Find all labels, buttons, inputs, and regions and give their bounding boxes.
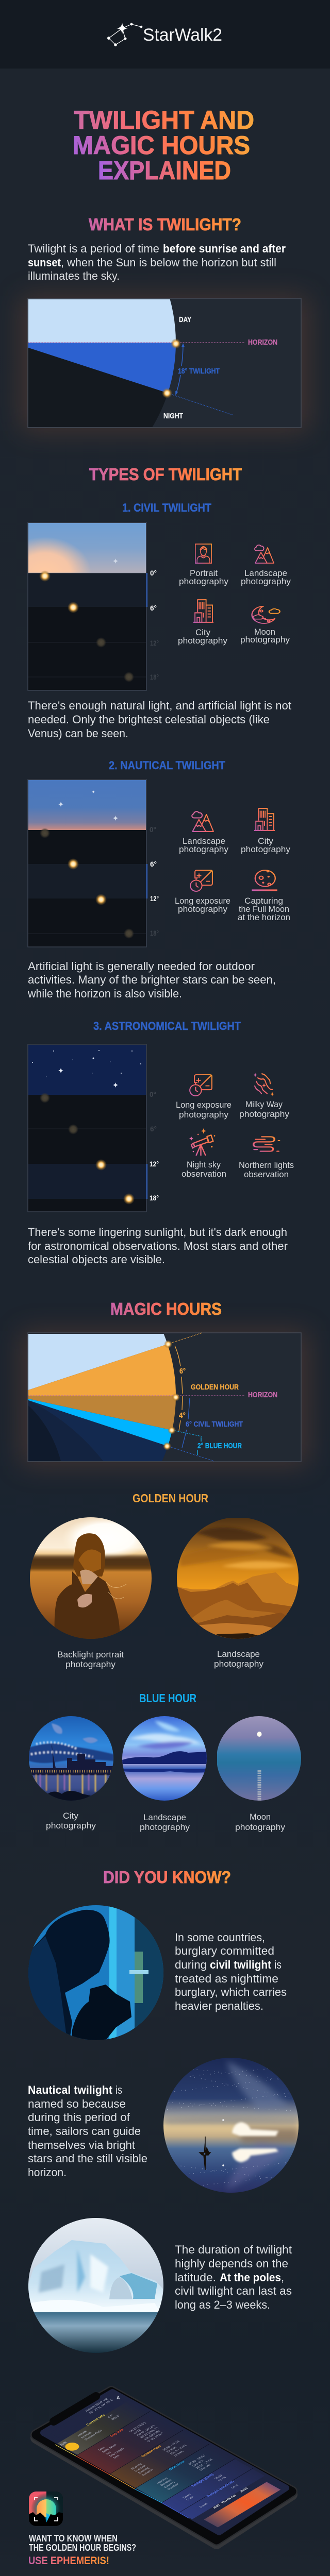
door handle <box>129 1952 148 2003</box>
day info: Solar Noon <box>102 2444 118 2453</box>
location: 60° 10' N, 24° 56' E <box>89 2399 114 2414</box>
caption: long exposure photography: photography <box>179 1110 228 1120</box>
nautical twilight section <box>179 2469 265 2519</box>
callout: want to know when: THE GOLDEN HOUR BEGINS? <box>29 2543 136 2553</box>
text: civil twilight description: Venus) can be seen. <box>28 727 128 740</box>
caption: city photography: photography <box>178 636 227 646</box>
caption: backlight portrait photography: photography <box>65 1659 116 1669</box>
caption: landscape photography <box>179 836 228 854</box>
golden hour: Duration <box>141 2469 154 2477</box>
date strip <box>212 2487 250 2509</box>
sailboat <box>200 2137 210 2170</box>
horizon line <box>28 1395 245 1396</box>
day sky <box>28 1334 168 1390</box>
blue hour: 15m 44s <box>199 2464 212 2471</box>
degree scale: 0° <box>150 1090 156 1098</box>
photo: backlight portrait <box>30 1516 152 1639</box>
arrow: 18 degrees <box>176 344 184 394</box>
heading: magic hours: MAGIC HOURS <box>110 1299 222 1318</box>
text: nautical twilight description <box>27 960 276 1000</box>
blue hour: Blue Hour <box>168 2460 186 2471</box>
label: horizon: HORIZON <box>248 338 277 347</box>
blue hour: 05:29 - 05:53 <box>188 2454 207 2465</box>
glow behind twilight diagram <box>21 296 308 431</box>
caption: moon photography <box>235 1812 286 1832</box>
captions for blue hour <box>46 1811 286 1832</box>
degree scale: 6° <box>150 860 157 868</box>
stars <box>58 790 118 821</box>
golden hour: 1h 24m <box>173 2450 185 2457</box>
day info: (38.5°, 180.4°) <box>136 2425 156 2437</box>
twilight limit line <box>168 393 234 415</box>
clouds and reflection <box>232 2122 278 2162</box>
caption: night sky observation: observation <box>182 1169 226 1179</box>
gloved hands <box>72 1985 131 2040</box>
icon: northern lights <box>254 1137 279 1151</box>
golden hour: Golden Hour <box>141 2445 162 2458</box>
photo: burglar <box>28 1905 163 2040</box>
iceberg shape <box>28 2240 163 2312</box>
day info: Sms <box>112 2454 121 2459</box>
degree scale: 6° <box>150 604 157 612</box>
blue hour section <box>136 2445 235 2502</box>
text: astronomical twilight description: There's some lingering sunlight, but it's dark enough <box>28 1226 287 1239</box>
caption: landscape photography: Landscape <box>217 1649 260 1659</box>
caption: backlight portrait photography: Backlight portrait <box>57 1650 124 1659</box>
colored edge lines <box>55 2445 189 2518</box>
text: burglary fact <box>175 1931 287 2012</box>
caption: capturing the full moon <box>238 896 290 922</box>
text: nautical fact: themselves via bright <box>28 2139 135 2151</box>
caption: long exposure photography <box>175 896 230 914</box>
section dividers <box>77 2411 253 2512</box>
label: civil twilight: 6° CIVIL TWILIGHT <box>186 1420 243 1429</box>
caption: moon photography <box>240 627 290 645</box>
title: TWILIGHT AND <box>74 106 254 134</box>
sun positions <box>39 570 134 682</box>
moon <box>257 1732 262 1737</box>
golden hour: 19:26 - 20:51 <box>170 2444 188 2455</box>
caption: landscape photography <box>140 1812 190 1832</box>
label: golden hour: GOLDEN HOUR <box>191 1383 239 1392</box>
degree scale <box>146 569 159 681</box>
title: MAGIC HOURS <box>73 131 250 160</box>
day info: 13h 59m 58s <box>143 2430 161 2441</box>
caption: portrait photography: Portrait <box>190 568 218 578</box>
degree scale: 18° <box>150 929 159 937</box>
heading: nautical twilight: 2. NAUTICAL TWILIGHT <box>109 759 225 772</box>
glow behind magic hours diagram <box>21 1331 308 1466</box>
caption: landscape photography <box>214 1649 263 1669</box>
stars <box>165 2066 299 2190</box>
day info section <box>77 2412 183 2474</box>
label: 4 degrees: 4° <box>179 1411 186 1420</box>
label: day: DAY <box>179 315 191 324</box>
day info: Rise <box>98 2447 106 2451</box>
arrows <box>175 1346 201 1455</box>
text: burglary fact: treated as nighttime <box>175 1972 278 1985</box>
heading: golden hour: GOLDEN HOUR <box>133 1492 208 1505</box>
golden hour: 05:55 - 07:18 <box>162 2440 181 2451</box>
golden hour: Morning <box>130 2463 143 2470</box>
header band with logo <box>0 0 330 69</box>
golden hour: 1h 23m <box>166 2446 177 2453</box>
nautical twilight: 04:42 <box>231 2484 241 2489</box>
day info: 20:23 (286.2°) <box>140 2427 159 2439</box>
day sky <box>28 299 176 343</box>
text: twilight definition: before sunrise and after <box>163 242 286 255</box>
caption: northern lights observation: Northern lights <box>239 1160 294 1170</box>
current info: 0.4° <box>107 2414 115 2419</box>
text: civil twilight description: needed. Only the brightest celestial objects (like <box>28 713 270 726</box>
text: burglary fact: is <box>274 1958 282 1971</box>
status letter: A <box>117 2395 120 2400</box>
blue hour wedge <box>28 1399 172 1446</box>
text: polar twilight fact <box>175 2243 292 2311</box>
stars <box>32 1050 141 1088</box>
text: civil twilight description: There's enough natural light, and artificial light is not <box>28 699 291 712</box>
caption: backlight portrait photography <box>57 1650 124 1669</box>
text: astronomical twilight description: for astronomical observations. Most stars and other <box>28 1240 288 1252</box>
night wedge <box>28 348 168 427</box>
heading: astronomical twilight: 3. ASTRONOMICAL TWILIGHT <box>93 1020 241 1032</box>
caption: moon photography: photography <box>235 1822 286 1832</box>
phone mockup: Ephemeris app <box>36 2392 292 2544</box>
caption: long exposure photography <box>176 1100 232 1120</box>
caption: city photography <box>46 1811 96 1831</box>
text: nautical fact: horizon. <box>28 2166 67 2179</box>
current info: Azimuth <box>80 2432 93 2439</box>
callout: want to know when: USE EPHEMERIS! <box>28 2555 109 2567</box>
caption: night sky observation: Night sky <box>187 1160 221 1170</box>
current info <box>72 2410 125 2441</box>
text: nautical twilight description: Artificial light is generally needed for outdoor <box>28 960 255 973</box>
caption: long exposure photography: photography <box>178 904 227 914</box>
caption: northern lights observation <box>239 1160 294 1179</box>
icon: long exposure <box>190 1075 212 1096</box>
title: EXPLAINED <box>98 156 231 185</box>
label: 6 degrees: 6° <box>179 1367 186 1376</box>
degree scale: 18° <box>150 1194 159 1202</box>
icon: telescope <box>189 1128 215 1156</box>
photo: golden mountains <box>177 1518 299 1641</box>
app screen content: SUN <box>60 2442 68 2446</box>
caption: city photography <box>241 836 290 854</box>
degree scale <box>146 1090 159 1202</box>
photo: blue hour landscape <box>122 1716 207 1801</box>
text: polar twilight fact: latitude. <box>175 2271 216 2284</box>
civil twilight: Dawn <box>183 2494 192 2499</box>
caption: capturing the full moon: at the horizon <box>238 912 290 922</box>
sun markers <box>163 1340 180 1450</box>
text: astronomical twilight description: celestial objects are visible. <box>28 1253 165 1266</box>
icon: Ephemeris app <box>29 2492 63 2526</box>
text: polar twilight fact: The duration of twilight <box>175 2243 292 2256</box>
caption: city photography <box>178 628 227 646</box>
day info: 0° 55' 57.37" <box>147 2432 165 2443</box>
heading: types of twilight: TYPES OF TWILIGHT <box>89 465 242 484</box>
caption: city photography: photography <box>46 1821 96 1831</box>
text: astronomical twilight description <box>28 1226 288 1266</box>
text: nautical fact: time, sailors can guide <box>28 2125 141 2138</box>
civil twilight section <box>162 2459 252 2512</box>
degree scale: 12° <box>150 894 159 903</box>
caption: landscape photography: Landscape <box>244 568 287 578</box>
civil twilight: 05:39 <box>214 2475 224 2480</box>
label: 18 degree twilight: 18° TWILIGHT <box>178 367 220 376</box>
civil twilight: 21:06 <box>218 2476 227 2482</box>
caption: portrait photography: photography <box>179 577 228 586</box>
blue hour: 15m 37s <box>192 2460 205 2467</box>
dotted limit lines <box>168 1333 214 1461</box>
nautical twilight: Twilight (Nautical) <box>206 2480 235 2498</box>
degree scale: 0° <box>150 825 156 834</box>
caption: moon photography: Moon <box>254 627 275 637</box>
photo: blue hour city <box>29 1716 113 1803</box>
icon: city <box>254 808 275 831</box>
caption: city photography: City <box>63 1811 79 1821</box>
day info: 13:22 <box>133 2429 142 2435</box>
blue hour: Evening <box>163 2481 176 2488</box>
text: burglary fact: during <box>175 1958 207 1971</box>
icon: landscape <box>192 811 213 832</box>
caption: milky way photography: Milky Way <box>245 1099 283 1109</box>
text: nautical fact <box>28 2083 147 2179</box>
heading: blue hour: BLUE HOUR <box>139 1691 196 1705</box>
skyline <box>29 1744 113 1775</box>
text: burglary fact: burglary committed <box>175 1944 274 1957</box>
heading: civil twilight: 1. CIVIL TWILIGHT <box>122 501 211 514</box>
degree scale <box>146 825 159 937</box>
day info: Set <box>105 2451 112 2455</box>
current info: 285.9° <box>111 2414 122 2421</box>
text: twilight definition: sunset <box>28 256 61 269</box>
golden hour section <box>110 2430 208 2488</box>
text: civil twilight description <box>28 699 291 740</box>
date strip: Thu 08 Apr <box>221 2494 238 2504</box>
caption: landscape photography: photography <box>241 577 291 586</box>
caption: landscape photography: photography <box>179 844 228 854</box>
civil twilight: Twilight (Civil) <box>191 2473 215 2487</box>
blue hour <box>151 2451 218 2490</box>
blue hour: Duration <box>160 2479 173 2486</box>
icon: landscape <box>255 545 274 563</box>
day chart <box>204 2482 280 2528</box>
text: twilight definition <box>28 242 286 282</box>
text: polar twilight fact: highly depends on the <box>175 2257 288 2270</box>
caption: milky way photography <box>239 1099 290 1119</box>
icon: milky way <box>253 1073 274 1096</box>
horizon line <box>28 342 245 343</box>
caption: landscape photography: Landscape <box>143 1812 186 1822</box>
date strip: 2021 <box>212 2504 222 2509</box>
text: twilight definition: Twilight is a period of time <box>28 242 159 255</box>
icon: city <box>193 600 213 622</box>
phone notch <box>54 2396 96 2421</box>
label: night: NIGHT <box>163 412 183 420</box>
icon: long exposure <box>190 870 212 891</box>
text: polar twilight fact: At the poles <box>220 2271 281 2284</box>
text: twilight definition: illuminates the sky. <box>28 269 120 282</box>
degree scale: 12° <box>150 1160 159 1168</box>
current info: Shadow Ratio <box>84 2429 104 2441</box>
location: Helsinki (GMT +3) <box>85 2398 109 2412</box>
night fan <box>28 1400 168 1461</box>
caption: moon photography: Moon <box>250 1812 271 1822</box>
golden hour: Evening <box>138 2467 150 2475</box>
caption: night sky observation <box>182 1160 226 1179</box>
current info: Altitude <box>77 2430 89 2437</box>
text: polar twilight fact: , <box>281 2271 284 2284</box>
nautical twilight <box>193 2480 241 2509</box>
app screen content <box>42 2392 286 2531</box>
phone screen <box>43 2392 286 2532</box>
title <box>73 106 254 185</box>
text: nautical fact: Nautical twilight <box>28 2083 113 2096</box>
callout: want to know when <box>28 2533 136 2567</box>
caption: long exposure photography: Long exposure <box>176 1100 232 1110</box>
photo: blue hour moon <box>217 1716 301 1801</box>
caption: moon photography: photography <box>240 635 290 645</box>
caption: capturing the full moon: the Full Moon <box>239 904 289 914</box>
caption: landscape photography <box>241 568 291 586</box>
sun positions <box>40 1093 135 1205</box>
day info: Day Info <box>109 2428 125 2437</box>
blue hour: Duration <box>167 2483 180 2490</box>
caption: landscape photography: Landscape <box>183 836 225 846</box>
nautical twilight: Dawn <box>199 2503 209 2509</box>
blue hour: 20:51 - 21:06 <box>195 2459 214 2469</box>
golden hour: Duration <box>134 2465 147 2472</box>
panel: civil twilight sky <box>28 522 159 690</box>
sun section <box>57 2400 149 2455</box>
text: polar twilight fact: long as 2–3 weeks. <box>175 2298 270 2311</box>
day info: 06:23 (73.9°) <box>129 2422 147 2433</box>
text: polar twilight fact: civil twilight can last as <box>175 2284 292 2297</box>
phone body <box>36 2392 292 2544</box>
text: nautical fact: is <box>116 2083 122 2096</box>
text: nautical twilight description: activities. Many of the brighter stars can be seen, <box>28 973 276 986</box>
star <box>113 558 118 564</box>
photo: iceberg <box>28 2218 163 2353</box>
logo wordmark: StarWalk2 <box>143 25 222 45</box>
moon reflection <box>258 1770 261 1801</box>
text: burglary fact: In some countries, <box>175 1931 265 1944</box>
blue hour: Morning <box>156 2477 169 2485</box>
sun markers <box>162 338 181 398</box>
panel: astronomical twilight sky <box>28 1044 159 1212</box>
icon: constellation logo <box>107 23 142 46</box>
civil twilight: Dusk <box>186 2496 195 2501</box>
date strip: 20:53 <box>240 2487 250 2493</box>
hooded figure <box>28 1910 110 2040</box>
woman silhouette <box>55 1533 126 1639</box>
text: nautical fact: stars and the still visible <box>28 2152 147 2165</box>
heading: did you know: DID YOU KNOW? <box>103 1868 231 1887</box>
caption: portrait photography <box>179 568 228 586</box>
panel: nautical twilight sky <box>28 779 159 947</box>
degree scale: 18° <box>150 673 159 681</box>
caption: city photography: photography <box>241 844 290 854</box>
sun positions <box>40 828 134 939</box>
text: nautical fact: during this period of <box>28 2111 130 2124</box>
sun disc <box>62 2441 82 2452</box>
icon: moon <box>252 606 280 623</box>
caption: city photography: City <box>195 628 210 637</box>
degree scale: 12° <box>150 639 159 647</box>
degree scale: 0° <box>150 569 157 577</box>
callout: want to know when: WANT TO KNOW WHEN <box>29 2533 118 2544</box>
photo: sailboat under stars <box>163 2058 299 2193</box>
caption: capturing the full moon: Capturing <box>244 896 283 906</box>
chart: twilight diagram <box>28 298 301 428</box>
golden hour <box>125 2437 192 2477</box>
caption: northern lights observation: observation <box>244 1170 289 1179</box>
caption: long exposure photography: Long exposure <box>175 896 230 906</box>
caption: city photography: City <box>258 836 274 846</box>
text: burglary fact: heavier penalties. <box>175 1999 263 2012</box>
icon: portrait <box>195 544 211 563</box>
caption: milky way photography: photography <box>239 1109 290 1119</box>
label: blue hour: 2° BLUE HOUR <box>197 1442 242 1450</box>
golden hour below horizon <box>28 1396 176 1430</box>
icon: full moon at the horizon <box>252 870 277 890</box>
current info: Current Info <box>86 2414 106 2426</box>
day info: Day Length <box>109 2448 125 2458</box>
caption: landscape photography: photography <box>214 1659 263 1669</box>
heading: what is twilight: WHAT IS TWILIGHT? <box>89 215 241 234</box>
degree scale: 6° <box>150 1125 157 1133</box>
caption: landscape photography: photography <box>140 1822 190 1832</box>
golden hour above horizon <box>28 1344 176 1396</box>
mountain and reflection <box>122 1751 207 1764</box>
chart: magic hours diagram <box>28 1333 301 1462</box>
day info <box>92 2417 167 2461</box>
text: burglary fact: burglary, which carries <box>175 1986 287 1998</box>
label: horizon: HORIZON <box>248 1391 277 1399</box>
text: burglary fact: civil twilight <box>210 1958 272 1971</box>
text: nautical fact: named so because <box>28 2097 126 2110</box>
text: nautical twilight description: while the horizon is also visible. <box>27 987 182 1000</box>
text: twilight definition: , when the Sun is below the horizon but still <box>61 256 276 269</box>
civil twilight <box>176 2471 227 2501</box>
twilight wedge <box>28 343 176 393</box>
